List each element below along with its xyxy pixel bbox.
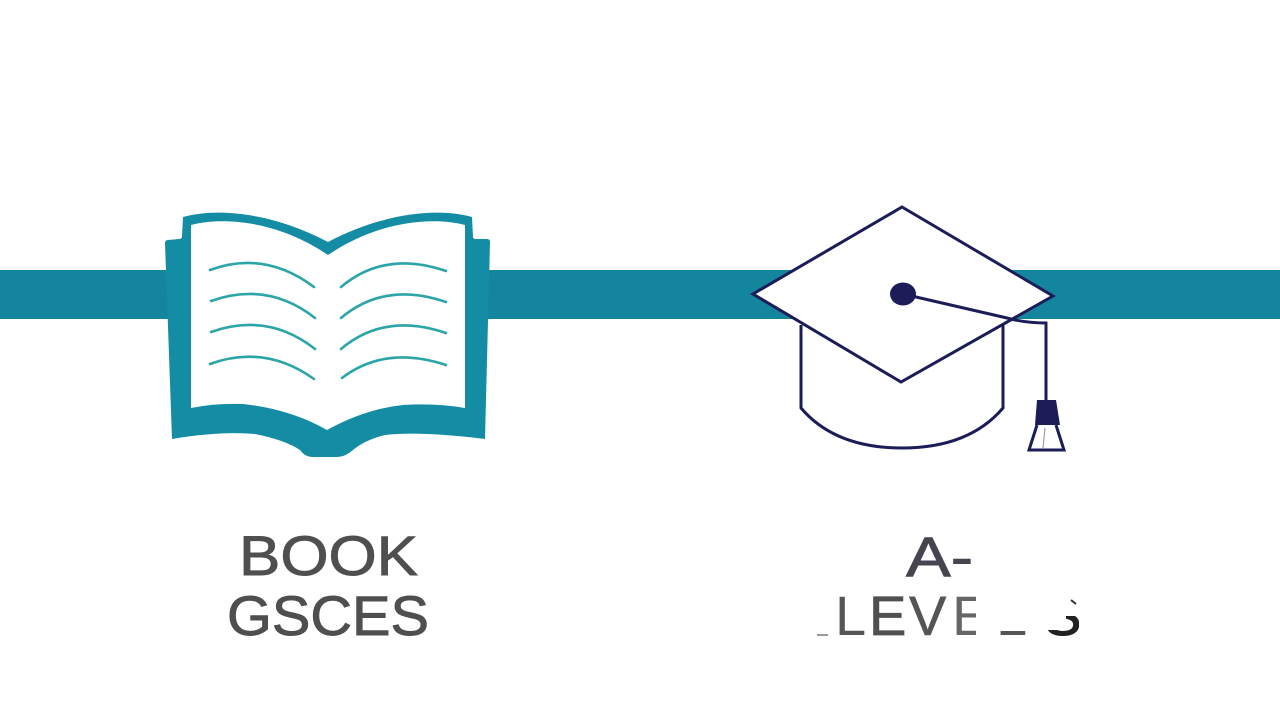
label: A-Levels partially revealed: E [952, 584, 989, 647]
label: A-Levels partially revealed: L [835, 584, 866, 647]
tassel cord [903, 294, 1046, 402]
icon: open book [165, 213, 490, 457]
text lines on left page [210, 263, 315, 379]
cap base [801, 323, 1003, 448]
label: A-Levels partially revealed: S [1044, 584, 1081, 647]
label: A-Levels partially revealed: E [869, 584, 906, 647]
label: A-Levels partially revealed: L [996, 584, 1027, 647]
book cover [165, 213, 490, 457]
tassel [1029, 400, 1064, 450]
mortarboard [753, 207, 1053, 382]
label: A-Levels partially revealed: V [909, 584, 947, 647]
button [890, 282, 916, 306]
label: book GSCES: GSCES [227, 584, 429, 647]
label: book GSCES: BOOK [239, 524, 418, 587]
infographic canvas [0, 205, 1280, 636]
label: A-Levels partially revealed [817, 537, 1079, 636]
label: book GSCES [227, 524, 429, 647]
teal horizontal band [0, 270, 1280, 319]
text lines on right page [341, 263, 446, 378]
icon: graduation cap [753, 207, 1064, 450]
book pages [191, 221, 465, 430]
label: A-Levels partially revealed: A- [906, 525, 973, 588]
